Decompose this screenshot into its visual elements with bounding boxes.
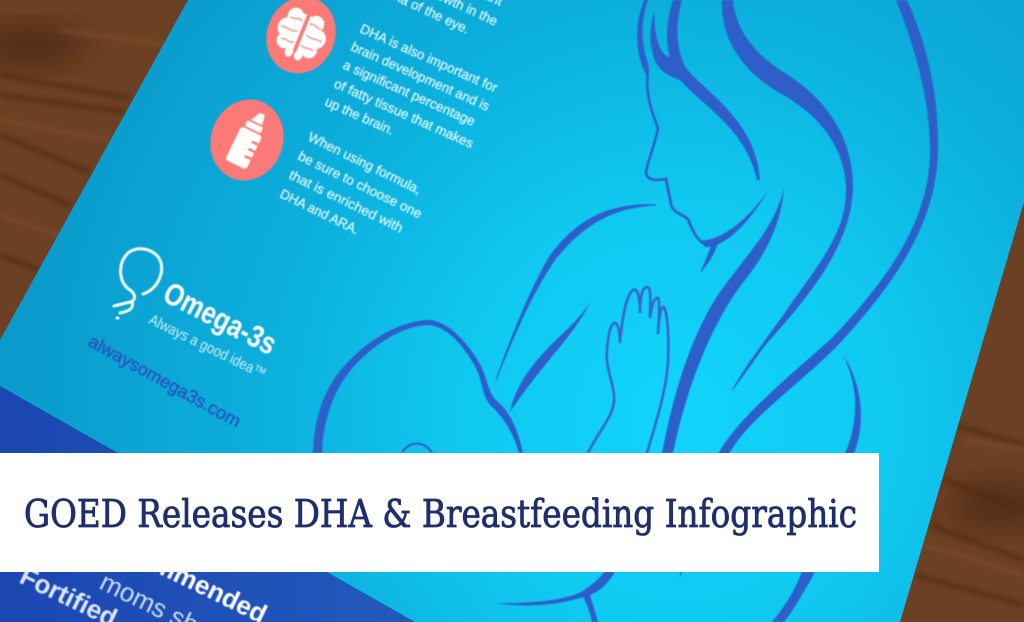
baby's hand [588, 287, 668, 453]
shoulder line [496, 205, 656, 380]
icon: brain [265, 0, 337, 74]
body text: brain development: up the brain. [323, 94, 396, 138]
body text: brain development: brain development and is [349, 39, 492, 114]
body text: formula advice: DHA and ARA. [278, 186, 362, 237]
website url: alwaysomega3s.com [85, 331, 244, 431]
body text: formula advice: be sure to choose one [296, 148, 424, 221]
title: GOED Releases DHA & Breastfeeding Infographic [24, 492, 857, 536]
baby's head [313, 320, 523, 453]
icon: baby bottle [210, 98, 284, 182]
body text: formula advice: that is enriched with [287, 167, 406, 235]
logo wordmark: Omega-3s [158, 275, 282, 362]
lower body curves [496, 570, 616, 622]
mother's face profile [646, 70, 703, 243]
jaw line [699, 189, 769, 247]
body text: retina [393, 0, 504, 34]
outer hair line [716, 0, 938, 458]
logo: Omega-3s [85, 249, 282, 431]
shoulder and robe strand [662, 188, 784, 453]
small tick [680, 572, 682, 578]
title banner [0, 453, 879, 572]
neck stroke [700, 243, 718, 273]
illustration: mother and baby [313, 0, 938, 622]
icon: light bulb [114, 249, 162, 318]
logo tagline: Always a good idea™ [146, 311, 269, 383]
body text: formula advice: When using formula, [306, 129, 424, 197]
body text: formula advice [278, 129, 424, 237]
arm strand [510, 302, 590, 412]
lower right curve [772, 572, 815, 622]
body text: brain development: DHA is also important for [358, 21, 500, 96]
right breast line [843, 355, 861, 456]
body text: brain development [323, 21, 500, 151]
left hair strand [637, 0, 649, 76]
blue footer band [0, 386, 415, 622]
baby's ear [402, 444, 432, 453]
inner hair line [722, 0, 853, 392]
body text: brain development: of fatty tissue that makes [332, 76, 476, 151]
front hair and fringe [650, 0, 760, 180]
body text: brain development: a significant percentage [341, 57, 478, 129]
